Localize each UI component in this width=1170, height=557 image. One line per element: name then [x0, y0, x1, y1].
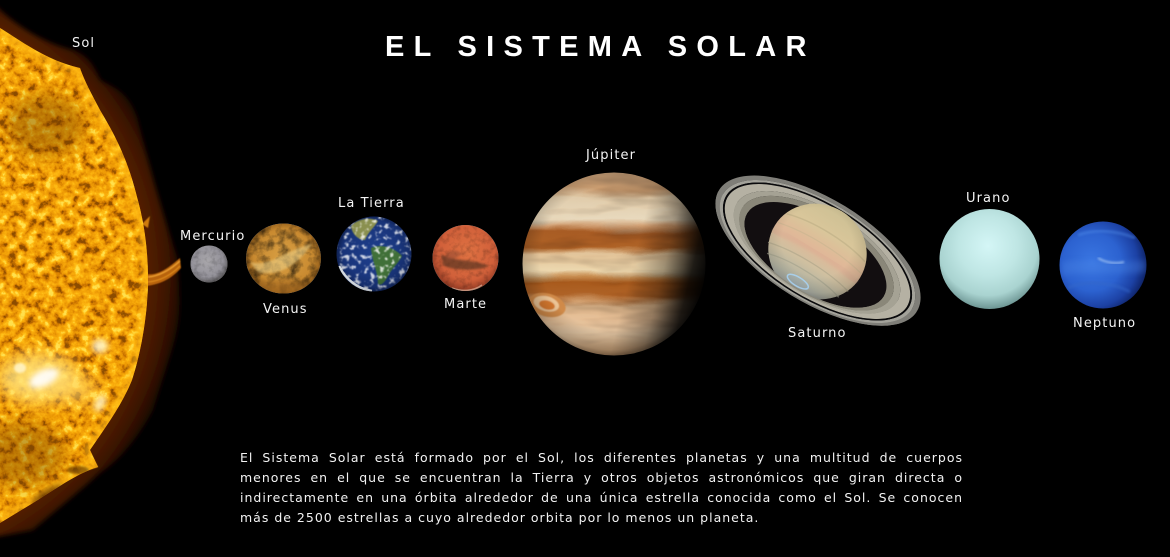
description text: más de 2500 estrellas a cuyo alrededor orbita por lo menos un planeta. — [240, 510, 759, 525]
description text — [240, 450, 963, 525]
clouds — [336, 216, 412, 292]
planet: Earth — [336, 216, 412, 292]
aurora — [785, 272, 810, 292]
description text: menores en el que se encuentran la Tierra y otros objetos astronómicos que giran directa o — [240, 470, 963, 485]
planet: Saturn — [715, 176, 921, 326]
front rings — [715, 191, 916, 326]
planet: Uranus — [940, 209, 1040, 309]
label: Saturno: Saturno — [788, 326, 847, 341]
sun rim highlight — [0, 28, 148, 523]
planet: Jupiter — [522, 172, 706, 356]
planet: Neptune — [1060, 222, 1146, 308]
planet: Mars — [432, 225, 498, 291]
back rings — [692, 146, 944, 356]
great red spot — [529, 292, 566, 318]
planet: Venus — [246, 224, 321, 296]
label: Sol: Sol — [72, 36, 95, 51]
label: La Tierra: La Tierra — [338, 196, 405, 211]
label: Venus: Venus — [263, 302, 308, 317]
label: Marte: Marte — [444, 297, 487, 312]
label: Júpiter: Júpiter — [586, 148, 636, 163]
Jupiter shading — [522, 172, 706, 356]
sun corona glow — [0, 5, 179, 537]
planet: Mercury — [190, 246, 228, 282]
Jupiter terminator — [522, 172, 706, 356]
label: Neptuno: Neptuno — [1073, 316, 1136, 331]
sun darker regions — [7, 95, 83, 155]
solar prominence — [82, 216, 181, 472]
label: Mercurio: Mercurio — [180, 229, 245, 244]
label: Urano: Urano — [966, 191, 1011, 206]
Saturn globe — [750, 185, 885, 318]
cloud bands — [522, 172, 706, 356]
sun bright regions — [0, 354, 78, 402]
description text: El Sistema Solar está formado por el Sol, los diferentes planetas y una multitud de cuerpos — [240, 450, 963, 465]
title: EL SISTEMA SOLAR — [385, 31, 816, 63]
ring shadow gap — [726, 179, 905, 330]
sun — [0, 5, 181, 537]
continents — [351, 219, 402, 285]
description text: indirectamente en una órbita alrededor de una única estrella conocida como el Sol. Se conocen — [240, 490, 963, 505]
sun surface — [0, 18, 158, 533]
